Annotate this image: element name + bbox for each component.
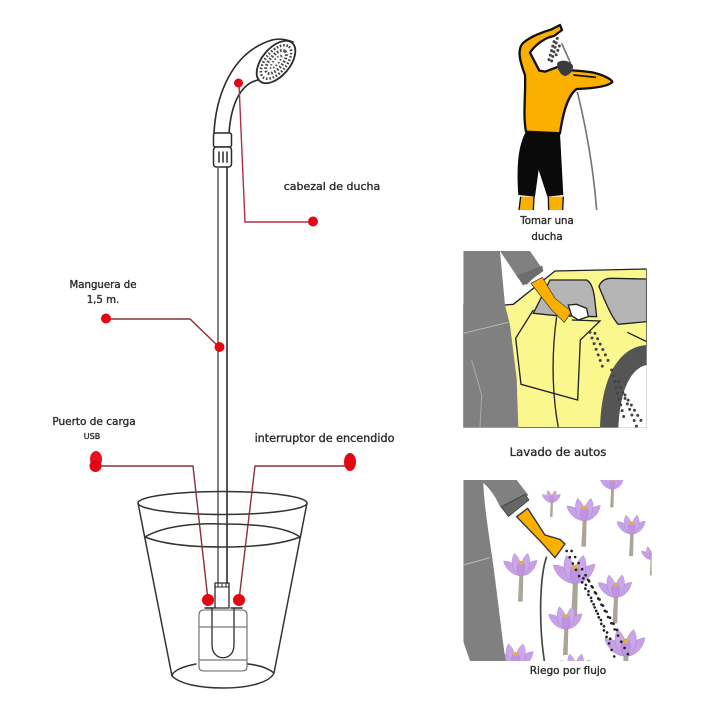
door lines <box>516 310 600 400</box>
label: puerto de carga: Puerto de carga <box>52 416 136 428</box>
sprayer <box>517 508 565 558</box>
person <box>463 251 518 428</box>
callout line: puerto de carga <box>90 451 214 606</box>
bucket <box>138 492 307 688</box>
hose tube <box>218 167 227 583</box>
pump bottle <box>199 583 247 671</box>
illustration: flow irrigation <box>463 480 652 661</box>
callout line: interruptor <box>233 453 356 606</box>
shower product diagram <box>138 34 307 688</box>
hose <box>562 43 597 210</box>
spray <box>590 332 642 427</box>
flowers <box>486 480 652 661</box>
shower head <box>214 34 303 133</box>
hose collar <box>214 133 232 167</box>
caption: tomar una ducha: ducha <box>531 232 563 243</box>
person <box>463 480 506 661</box>
illustration: car washing <box>463 251 647 428</box>
hair <box>557 61 573 76</box>
label: manguera: Manguera de <box>69 280 137 291</box>
label: puerto de carga <box>52 416 136 441</box>
legs <box>519 197 563 210</box>
callout line: cabezal de ducha <box>234 78 318 226</box>
label: interruptor: interruptor de encendido <box>255 432 395 445</box>
label: manguera: 1,5 m. <box>87 295 119 306</box>
wheel <box>600 345 647 428</box>
caption: lavado de autos: Lavado de autos <box>510 445 606 459</box>
caption: tomar una ducha: Tomar una <box>519 216 574 227</box>
label: manguera <box>69 280 137 306</box>
callout line: manguera <box>101 314 224 352</box>
caption: riego por flujo: Riego por flujo <box>530 665 606 677</box>
sprayer <box>531 277 572 322</box>
illustration: person showering <box>518 25 612 210</box>
water <box>548 38 559 65</box>
windows <box>533 280 597 317</box>
spray <box>567 551 628 658</box>
hose <box>541 557 547 661</box>
body <box>520 25 612 133</box>
shorts <box>518 132 563 197</box>
caption: tomar una ducha <box>519 216 574 243</box>
label: cabezal de ducha: cabezal de ducha <box>284 180 380 193</box>
car body <box>463 269 647 428</box>
label: puerto de carga: USB <box>84 432 100 441</box>
